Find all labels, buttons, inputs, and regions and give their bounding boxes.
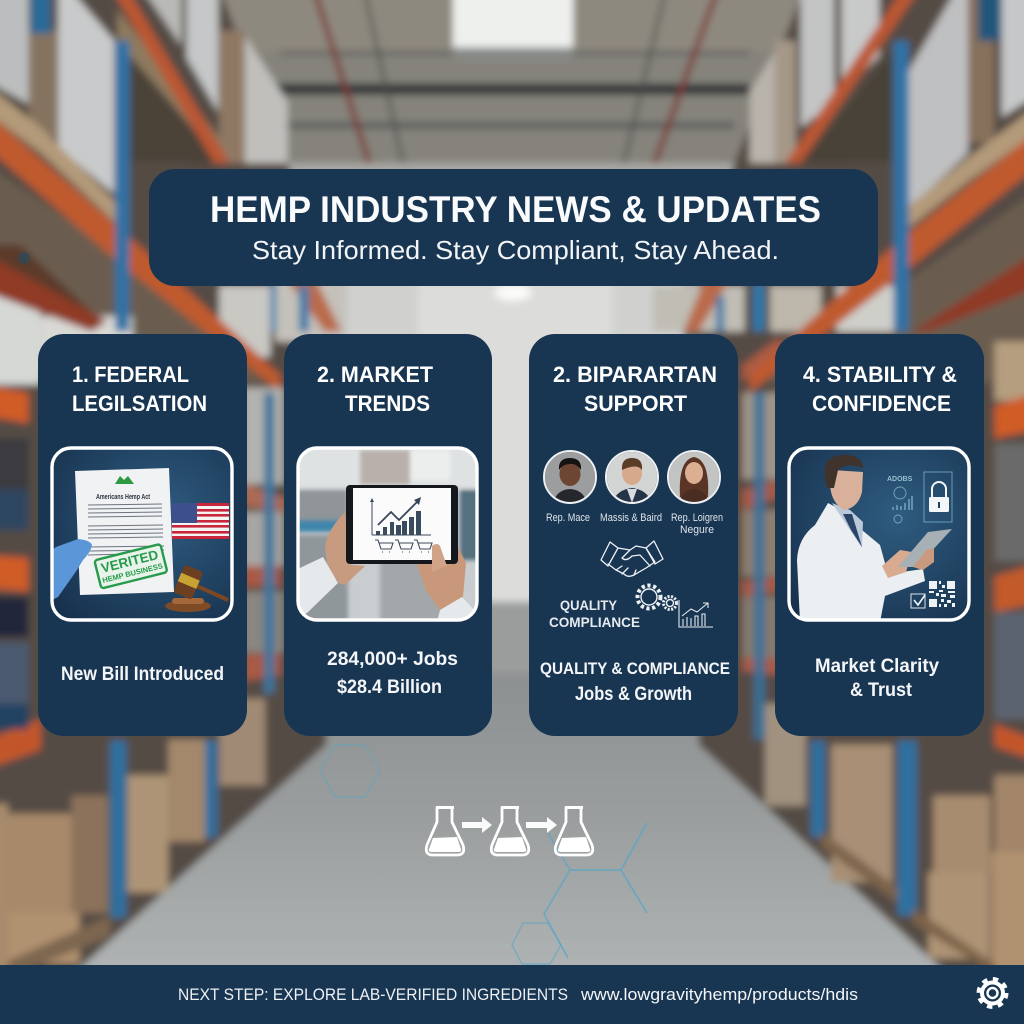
portrait names: Rep. Loigren: [671, 512, 723, 524]
left hand behind tablet: [325, 512, 350, 583]
left sleeve: [300, 557, 338, 614]
image: scientist with tablet: [789, 448, 969, 622]
portrait: Rep. Mace: [544, 451, 596, 505]
flag: [172, 503, 229, 539]
stamp: [94, 544, 167, 589]
gavel: [165, 565, 228, 612]
molecule hexagon outlines: [320, 745, 647, 964]
caption: [540, 659, 730, 705]
left boxes: [0, 804, 8, 994]
portrait names: Massis & Baird: [600, 512, 662, 524]
heading: 2. BIPARARTAN: [553, 362, 717, 387]
portrait names: Rep. Mace: [546, 512, 590, 524]
caption: [327, 649, 458, 698]
heading: [553, 362, 717, 416]
icon: growth chart: [679, 600, 713, 627]
portrait names: Negure: [680, 524, 714, 536]
tablet: [898, 529, 952, 567]
floor: [31, 673, 979, 994]
back wall: [337, 280, 683, 688]
tablet: [346, 485, 458, 564]
scientist: [797, 455, 925, 622]
icon: handshake: [601, 541, 663, 576]
heading: 4. STABILITY &: [803, 362, 957, 387]
left upper loads: [0, 0, 29, 104]
left rack background: [0, 0, 326, 994]
quality compliance label: COMPLIANCE: [549, 614, 640, 630]
left orange beams: [0, 97, 280, 393]
heading: TRENDS: [345, 391, 430, 416]
right sleeve: [438, 597, 473, 618]
right uprights: [893, 41, 909, 331]
next step call to action: NEXT STEP: EXPLORE LAB-VERIFIED INGREDIENTS: [178, 985, 568, 1004]
heading: [317, 362, 434, 416]
ceiling: [194, 0, 826, 173]
heading: [803, 362, 957, 416]
image: hands holding tablet with chart: [296, 446, 479, 622]
padlock icon: [929, 482, 949, 512]
panel: stability and confidence: [775, 334, 984, 736]
portrait: Massie & Baird: [606, 451, 658, 505]
icon: flask 2: [491, 806, 529, 855]
document: [75, 468, 174, 595]
caption: New Bill Introduced: [61, 664, 224, 685]
title banner: [149, 169, 878, 286]
quality compliance label: [549, 597, 640, 630]
heading: [72, 362, 207, 416]
left mid stock: [0, 288, 41, 384]
quality compliance label: QUALITY: [560, 597, 618, 613]
thumb over tablet: [432, 544, 447, 572]
stamp: VERITED: [99, 547, 160, 576]
url: www.lowgravityhemp/products/hdis: [580, 985, 858, 1004]
heading: LEGILSATION: [72, 391, 207, 416]
icon: flask 1: [426, 806, 464, 855]
caption: Jobs & Growth: [575, 684, 692, 705]
icon: gears: [638, 586, 676, 610]
trend chart: [370, 497, 431, 535]
caption: & Trust: [850, 680, 913, 701]
panel: market trends: [284, 334, 492, 736]
heading: 1. FEDERAL: [72, 362, 189, 387]
glove: [52, 539, 92, 600]
caption: $28.4 Billion: [337, 677, 442, 698]
heading: SUPPORT: [584, 391, 688, 416]
panel: bipartisan support: [529, 334, 738, 736]
shopping carts: [375, 540, 432, 552]
QR code: [929, 581, 955, 607]
left uprights: [115, 41, 130, 331]
arrow: [462, 817, 492, 833]
holographic panels: ADOBS: [887, 476, 913, 483]
right mid stock: [994, 342, 1024, 401]
right rack background: [699, 0, 1024, 994]
arrow: [526, 817, 557, 833]
caption: QUALITY & COMPLIANCE: [540, 659, 730, 678]
right underside: [765, 178, 1024, 382]
left underside: [0, 153, 265, 382]
caption: [815, 656, 939, 701]
heading: 2. MARKET: [317, 362, 434, 387]
heading: CONFIDENCE: [812, 391, 951, 416]
icon: flask 3: [555, 806, 593, 855]
flask process: three flasks with arrows: [426, 806, 593, 855]
footer bar: [0, 965, 1024, 1024]
right hand palm behind tablet: [417, 547, 466, 610]
caption: 284,000+ Jobs: [327, 649, 458, 670]
checkbox: [911, 594, 925, 608]
portrait: Rep. Lofgren: [668, 451, 720, 505]
right upper loads: [1002, 0, 1024, 117]
right orange beams: [750, 117, 1024, 393]
panel: federal legislation: [38, 334, 247, 736]
holographic panels: [887, 472, 952, 523]
caption: Market Clarity: [815, 656, 939, 677]
main title: HEMP INDUSTRY NEWS & UPDATES: [210, 189, 821, 230]
right boxes: [933, 796, 990, 872]
document: Americans Hemp Act: [96, 492, 150, 501]
subtitle: Stay Informed. Stay Compliant, Stay Ahead.: [252, 235, 779, 265]
stamp: HEMP BUSINESS: [101, 561, 164, 585]
image: bill document, flag and gavel: [52, 448, 232, 620]
icon: settings gear: [980, 980, 1006, 1006]
portrait names: [546, 512, 723, 536]
